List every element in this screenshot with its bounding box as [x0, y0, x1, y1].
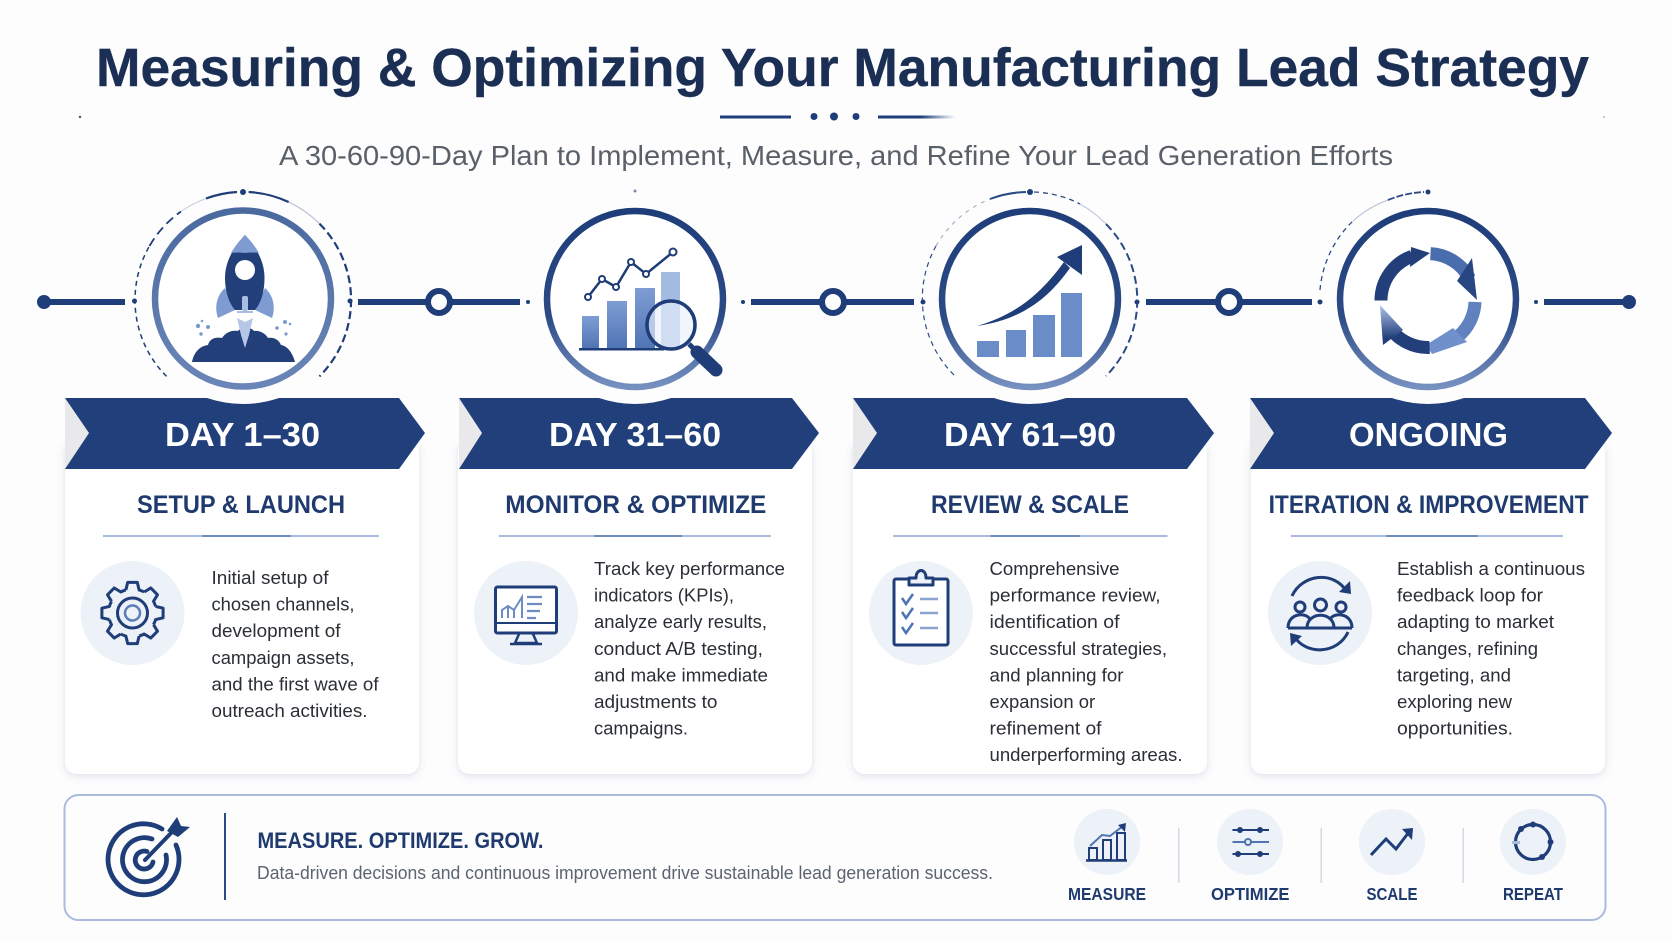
panel: day 31-60 — [458, 398, 819, 774]
text: setup and launch description: chosen channels, — [212, 594, 354, 615]
ribbon: ongoing — [1250, 398, 1612, 469]
text: iteration description — [1397, 558, 1585, 739]
item: optimize — [1211, 809, 1290, 904]
item: scale: SCALE — [1366, 884, 1418, 904]
icon: target with arrow — [108, 817, 190, 895]
text: review and scale description: refinement of — [990, 718, 1102, 739]
text: review and scale description: identification of — [990, 611, 1120, 632]
icon: cycle arrows in ring — [1320, 190, 1516, 387]
item: optimize: OPTIMIZE — [1211, 884, 1290, 904]
text: setup and launch description: outreach activities. — [212, 700, 368, 721]
text: monitor and optimize description: adjustments to — [594, 691, 718, 712]
text: iteration description: exploring new — [1397, 691, 1513, 712]
text: review and scale description: expansion or — [990, 691, 1095, 712]
panel: ongoing — [1250, 398, 1612, 774]
text: monitor and optimize description: conduct A/B testing, — [594, 638, 763, 659]
callout description: Data-driven decisions and continuous improvement drive sustainable lead generation success. — [257, 863, 993, 883]
item: measure: MEASURE — [1068, 884, 1146, 904]
timeline — [37, 291, 1636, 313]
text: review and scale description: and planning for — [990, 664, 1124, 685]
icon: gear — [80, 561, 184, 665]
title ornament — [79, 112, 1605, 120]
icon: team with cycle arrows — [1268, 561, 1372, 665]
icon: growth chart in ring — [920, 189, 1140, 387]
ribbon: day 1-30 — [65, 398, 425, 469]
text: iteration description: Establish a continuous — [1397, 558, 1585, 579]
icon: rocket in ring — [132, 189, 352, 386]
ribbon: day 61-90: DAY 61–90 — [944, 416, 1116, 453]
panel: day 61-90 — [853, 398, 1214, 774]
item: scale — [1359, 809, 1425, 904]
text: monitor and optimize description: and make immediate — [594, 664, 768, 685]
text: review and scale description: underperforming areas. — [990, 744, 1182, 765]
callout heading: MEASURE. OPTIMIZE. GROW. — [258, 828, 544, 853]
text: review and scale description: successful strategies, — [990, 638, 1167, 659]
ribbon: day 1-30: DAY 1–30 — [165, 416, 320, 453]
text: monitor and optimize description: campaigns. — [594, 718, 688, 739]
panel: day 1-30 — [65, 398, 425, 774]
text: review and scale description: Comprehensive — [990, 558, 1120, 579]
ribbon: day 31-60 — [459, 398, 819, 469]
text: setup and launch description — [212, 567, 379, 721]
text: setup and launch description: development of — [212, 620, 341, 641]
icon: monitor — [474, 561, 578, 665]
icon: clipboard — [869, 561, 973, 665]
ribbon: day 31-60: DAY 31–60 — [549, 416, 721, 453]
text: iteration description: adapting to market — [1397, 611, 1554, 632]
text: review and scale description — [990, 558, 1182, 765]
ribbon: day 61-90 — [853, 398, 1214, 469]
title: Measuring & Optimizing Your Manufacturing Lead Strategy — [96, 38, 1589, 98]
heading: review and scale: REVIEW & SCALE — [931, 491, 1129, 519]
subtitle: A 30-60-90-Day Plan to Implement, Measure, and Refine Your Lead Generation Efforts — [279, 140, 1393, 171]
text: iteration description: targeting, and — [1397, 664, 1511, 685]
text: monitor and optimize description: indicators (KPIs), — [594, 585, 734, 606]
text: setup and launch description: campaign assets, — [212, 647, 354, 668]
text: monitor and optimize description: Track key performance — [594, 558, 785, 579]
text: iteration description: opportunities. — [1397, 718, 1513, 739]
panel: summary bar — [64, 795, 1606, 920]
item: measure — [1068, 809, 1146, 904]
icon: analytics with magnifier in ring — [547, 190, 723, 387]
ribbon: ongoing: ONGOING — [1349, 416, 1508, 453]
text: review and scale description: performance review, — [990, 585, 1160, 606]
item: repeat — [1500, 809, 1566, 904]
item: repeat: REPEAT — [1503, 884, 1563, 904]
text: iteration description: changes, refining — [1397, 638, 1538, 659]
heading: monitor and optimize: MONITOR & OPTIMIZE — [505, 491, 766, 519]
text: iteration description: feedback loop for — [1397, 585, 1543, 606]
heading: setup and launch: SETUP & LAUNCH — [137, 491, 345, 519]
text: monitor and optimize description: analyze early results, — [594, 611, 767, 632]
heading: iteration and improvement: ITERATION & IMPROVEMENT — [1269, 491, 1589, 519]
text: setup and launch description: and the first wave of — [212, 673, 379, 694]
text: setup and launch description: Initial setup of — [212, 567, 329, 588]
text: monitor and optimize description — [594, 558, 785, 739]
